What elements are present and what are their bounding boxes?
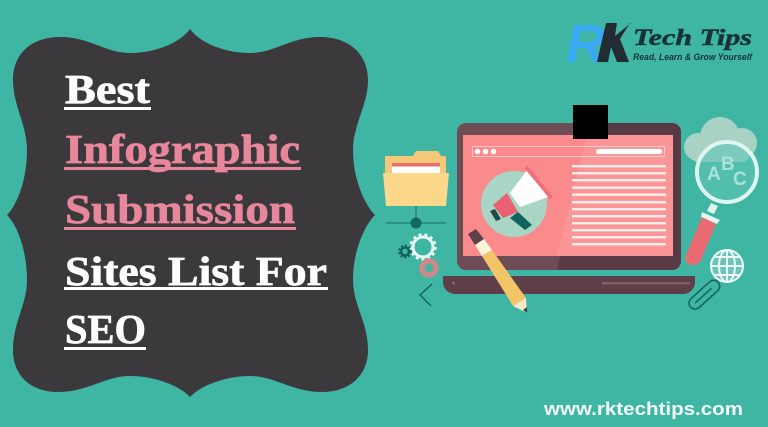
icon: magnifying glass: A bbox=[707, 164, 721, 185]
folder network connector bbox=[386, 206, 446, 228]
website url: www.rktechtips.com bbox=[543, 399, 743, 419]
title line: SEO: SEO bbox=[65, 306, 146, 352]
illustration: laptop bbox=[443, 123, 695, 294]
black square patch bbox=[573, 105, 608, 139]
icon: magnifying glass: C bbox=[733, 169, 747, 190]
logo wordmark: Tech Tips bbox=[633, 25, 752, 50]
laptop lid bbox=[457, 123, 681, 270]
icon: folder bbox=[383, 151, 449, 228]
logo tagline: Read, Learn & Grow Yourself bbox=[633, 52, 753, 63]
logo mark: RK: R bbox=[566, 14, 605, 74]
icon: globe bbox=[711, 250, 743, 282]
title line: Best: Best bbox=[65, 66, 150, 112]
icon: gears bbox=[399, 234, 436, 275]
laptop base bbox=[443, 276, 695, 294]
title bbox=[64, 66, 328, 352]
icon: back chevron bbox=[420, 284, 432, 306]
logo mark: RK bbox=[566, 14, 631, 74]
icon: magnifying glass: B bbox=[721, 154, 735, 175]
icon: cloud bbox=[684, 117, 757, 162]
title line: Sites List For: Sites List For bbox=[65, 248, 327, 294]
icon: paperclip bbox=[687, 278, 722, 312]
logo: RK Tech Tips bbox=[566, 14, 753, 74]
text lines on screen bbox=[572, 165, 666, 245]
icon: pencil bbox=[468, 229, 527, 313]
icon: megaphone bbox=[481, 165, 553, 237]
title line: Infographic: Infographic bbox=[65, 126, 300, 172]
title line: Submission: Submission bbox=[65, 186, 295, 232]
laptop screen bbox=[463, 135, 673, 256]
browser bar bbox=[472, 146, 664, 156]
icon: magnifying glass bbox=[685, 142, 757, 265]
panel: title plaque bbox=[7, 29, 375, 397]
